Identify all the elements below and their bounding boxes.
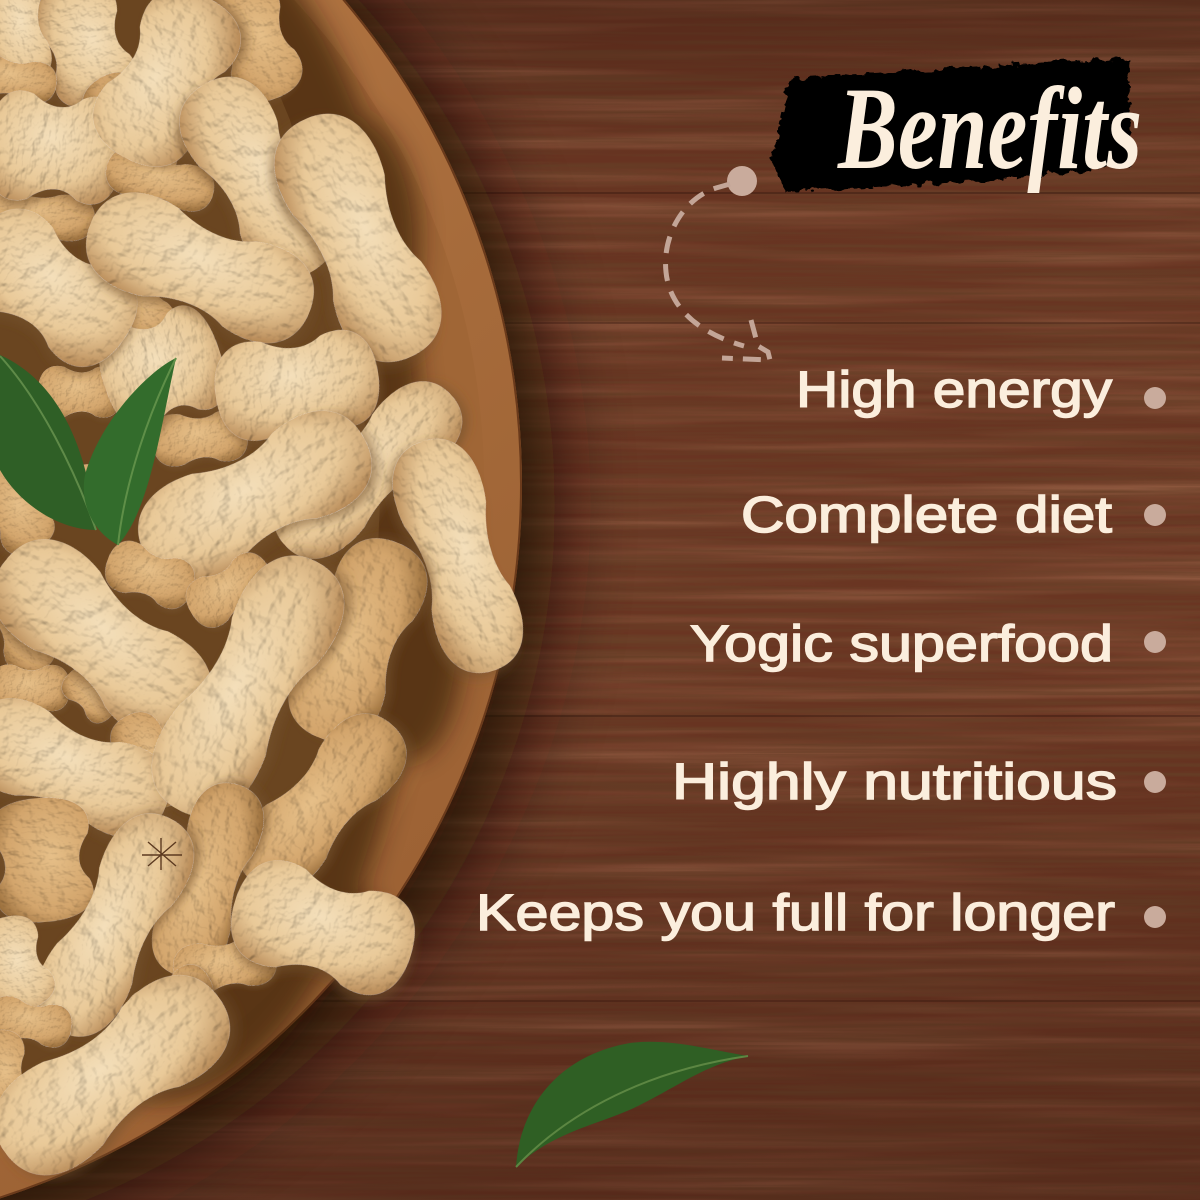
shadow under peanuts (0, 0, 465, 1100)
brush stroke (772, 58, 1132, 192)
benefits list (476, 361, 1166, 941)
dashed curve (666, 184, 744, 346)
peanut tip fibres (142, 838, 182, 870)
peanuts (0, 0, 536, 1196)
wooden bowl (0, 0, 522, 1200)
benefit: Keeps you full for longer: Keeps you full for longer (476, 884, 1115, 941)
benefit: Complete diet: Complete diet (741, 486, 1112, 543)
benefit: Highly nutritious: Highly nutritious (672, 753, 1117, 810)
peanut pile (0, 0, 536, 1196)
backing between peanuts (0, 0, 380, 1120)
arrow head (722, 320, 770, 360)
benefit: High energy: High energy (796, 361, 1113, 418)
start dot (727, 166, 757, 196)
heading: Benefits (772, 58, 1142, 194)
benefit: Yogic superfood: Yogic superfood (690, 615, 1113, 672)
icon: leaf on table (516, 1042, 748, 1167)
bowl shadow (0, 0, 555, 1200)
icon: leaves in bowl (0, 355, 176, 545)
dashed arrow (666, 166, 770, 360)
